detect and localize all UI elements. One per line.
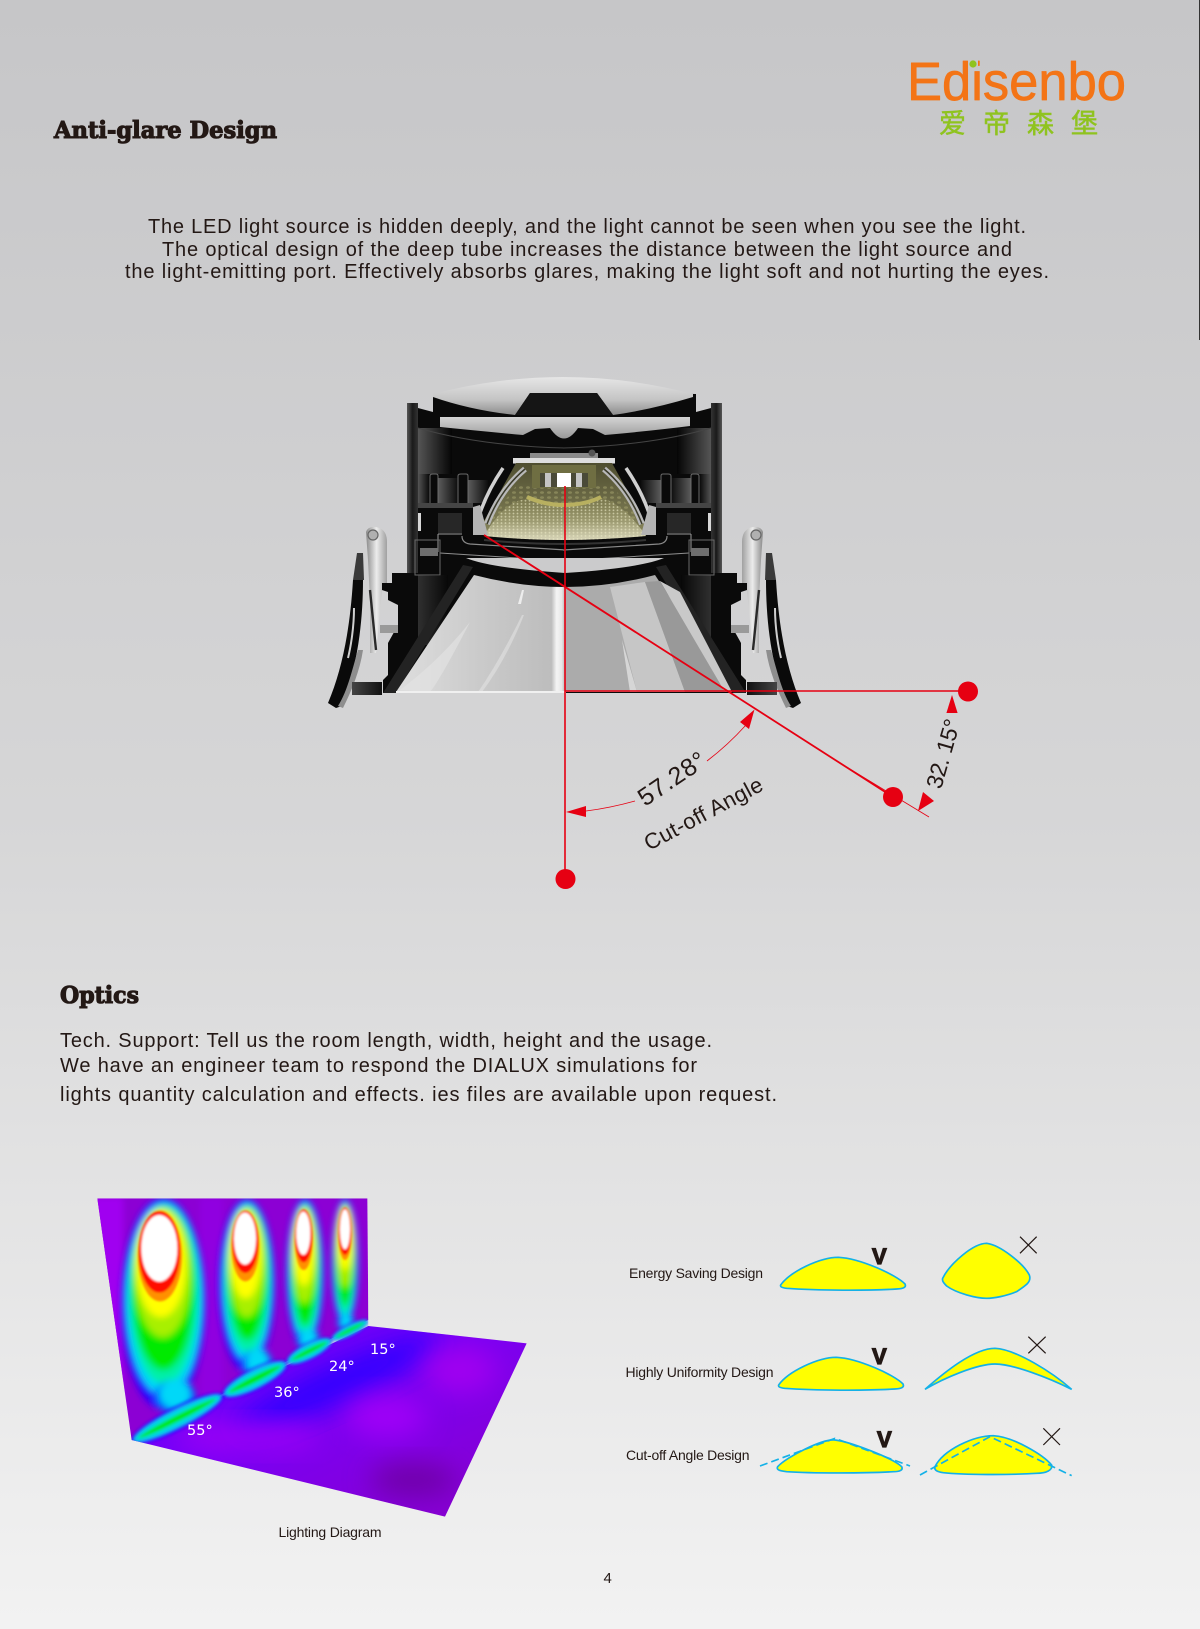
check marks: V (872, 1344, 887, 1369)
text block: optics description: Tech. Support: Tell us the room length, width, height and the usage. (60, 1030, 712, 1052)
heading: Optics: Optics (60, 982, 139, 1009)
curve: uniformity good (779, 1357, 903, 1390)
labels: design rows: Cut-off Angle Design (626, 1447, 750, 1463)
heat map angle labels (187, 1342, 396, 1439)
reflector cone (396, 575, 565, 692)
text block: anti-glare description (125, 216, 1049, 283)
crescent gap (466, 558, 664, 573)
blob 3 outer (286, 1198, 324, 1349)
page number: 4 (604, 1570, 612, 1587)
check marks: V (877, 1427, 892, 1452)
text block: anti-glare description: The optical design of the deep tube increases the distance between the light source and (162, 239, 1012, 261)
check marks (872, 1244, 892, 1452)
curve: energy saving good (781, 1257, 905, 1290)
logo: Edisenbo: 爱帝森堡 (939, 109, 1098, 139)
text block: optics description (60, 1030, 777, 1106)
text block: optics description: We have an engineer team to respond the DIALUX simulations for (60, 1055, 697, 1077)
check marks: V (872, 1244, 887, 1269)
labels: design rows (626, 1265, 774, 1463)
text block: optics description: lights quantity calculation and effects. ies files are available upon request. (60, 1084, 777, 1106)
logo: Edisenbo (907, 52, 1126, 139)
wall-floor seam lobes (126, 1315, 371, 1452)
heat map angle labels: 36° (274, 1385, 300, 1401)
angle label: Cut-off Angle: Cut-off Angle (640, 772, 767, 855)
diagram: distribution shape comparison (760, 1237, 1072, 1476)
arm (366, 527, 387, 653)
text block: anti-glare description: the light-emitting port. Effectively absorbs glares, making the light soft and not hurting the eyes. (125, 261, 1049, 283)
chart: lighting heat map (93, 1197, 533, 1520)
spring (353, 553, 364, 580)
red angle lines and markers (484, 486, 978, 889)
curve: energy saving bad (942, 1243, 1030, 1298)
heading: Anti-glare Design: Anti-glare Design (53, 117, 277, 144)
curve: cut-off good (777, 1440, 902, 1473)
angle label: 57.28: 57.28° (633, 746, 711, 812)
blob 4 outer (332, 1199, 358, 1328)
logo: Edisenbo: Edisenbo (907, 52, 1126, 112)
heat map angle labels: 15° (370, 1342, 396, 1358)
cone dark edge strips (383, 565, 746, 693)
heat map angle labels: 55° (187, 1423, 213, 1439)
blob 2 outer (219, 1199, 275, 1372)
middle disk (440, 417, 690, 438)
cross marks (1020, 1237, 1060, 1445)
top cap (433, 377, 693, 415)
labels: design rows: Energy Saving Design (629, 1265, 763, 1281)
reflector dish (530, 453, 598, 459)
blob 1 outer (121, 1197, 205, 1409)
foot (352, 682, 382, 695)
necks (154, 1379, 196, 1414)
caption: Lighting Diagram: Lighting Diagram (278, 1524, 382, 1540)
curve: cut-off bad (935, 1436, 1052, 1475)
labels: design rows: Highly Uniformity Design (626, 1364, 774, 1380)
product illustration: downlight cross-section (328, 377, 801, 708)
heat map angle labels: 24° (329, 1359, 355, 1375)
curve: uniformity bad (925, 1348, 1072, 1389)
text block: anti-glare description: The LED light source is hidden deeply, and the light cannot be seen when you see the light. (148, 216, 1026, 238)
angle label: 32.15: 32. 15° (921, 716, 965, 791)
